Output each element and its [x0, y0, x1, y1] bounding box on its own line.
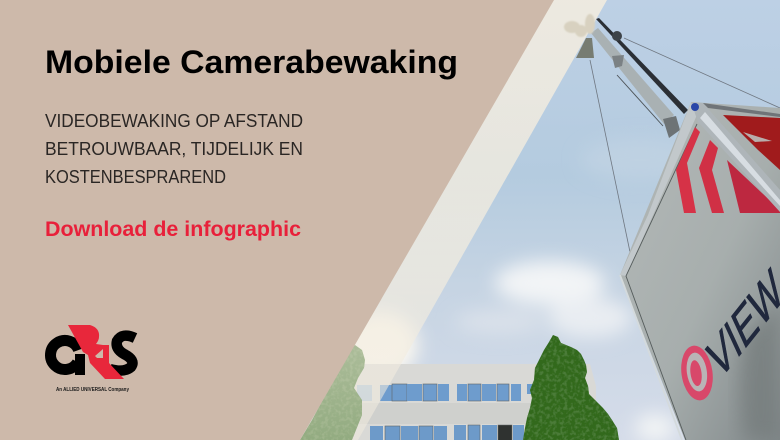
- frame left: [620, 102, 700, 276]
- subtitle text block: BETROUWBAAR, TIJDELIJK EN: [45, 139, 303, 159]
- tree: left: [300, 345, 365, 440]
- horn: [576, 38, 594, 58]
- title: Mobiele Camerabewaking: [45, 44, 458, 80]
- frame band: [691, 102, 780, 212]
- photo: mobile camera unit against sky: [290, 0, 780, 440]
- subtitle text block: [45, 111, 303, 187]
- clouds: [355, 148, 676, 440]
- strapline: An ALLIED UNIVERSAL Company: [56, 387, 130, 393]
- windows: upper row: [357, 384, 536, 401]
- red triangle: [727, 160, 780, 213]
- sky: [290, 0, 780, 440]
- subtitle text block: VIDEOBEWAKING OP AFSTAND: [45, 111, 303, 131]
- subtitle text block: KOSTENBESPRAREND: [45, 167, 226, 187]
- wires: [590, 38, 780, 252]
- letter G: [50, 341, 79, 370]
- logo on panel: @ mark: [681, 346, 713, 400]
- building: [330, 364, 596, 440]
- truck panel: [620, 102, 780, 440]
- camera on mast: [564, 14, 595, 37]
- call to action: Download de infographic: [45, 218, 301, 241]
- panel body: [620, 102, 780, 440]
- G4S logo: [50, 325, 135, 393]
- mast: [576, 18, 688, 138]
- red sign upper: [723, 115, 780, 170]
- windows: lower row: [370, 425, 524, 440]
- letter S: [110, 336, 135, 371]
- translucent diagonal band: [299, 0, 607, 440]
- chevron 1: [676, 127, 700, 213]
- chevron 2: [699, 140, 724, 213]
- numeral 4: [68, 325, 124, 379]
- tree: right: [523, 335, 619, 440]
- panel shadow: [740, 300, 780, 440]
- facade band: [368, 403, 531, 424]
- tan panel: [0, 0, 554, 440]
